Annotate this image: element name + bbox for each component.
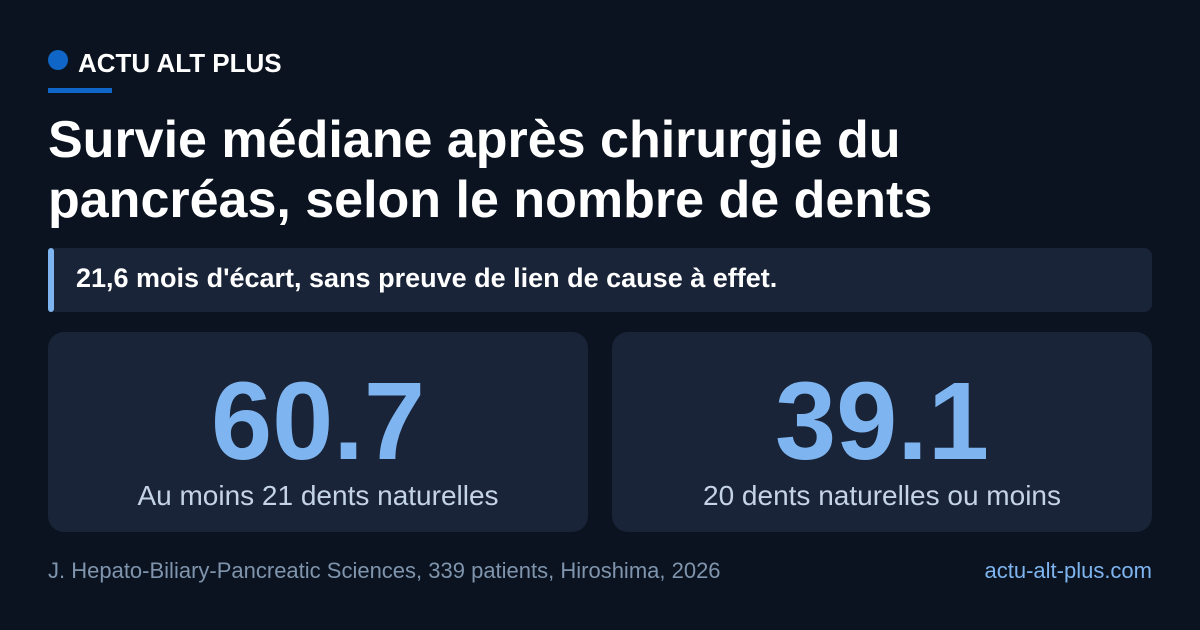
stat value: 60.7 bbox=[211, 360, 425, 483]
icon: brand dot bbox=[48, 50, 68, 70]
accent bar bbox=[48, 248, 54, 312]
panel: 20 teeth or fewer bbox=[612, 332, 1152, 532]
brand name: ACTU ALT PLUS bbox=[78, 48, 282, 78]
panel: key message bbox=[48, 248, 1152, 312]
key message text: 21,6 mois d'écart, sans preuve de lien de cause à effet. bbox=[76, 263, 777, 293]
title: pancréas, selon le nombre de dents bbox=[48, 171, 932, 229]
website: actu-alt-plus.com bbox=[984, 558, 1152, 583]
stat value: 39.1 bbox=[775, 360, 989, 483]
title bbox=[48, 111, 932, 229]
panel: at least 21 teeth bbox=[48, 332, 588, 532]
stat label: 20 dents naturelles ou moins bbox=[703, 480, 1061, 511]
brand underline bbox=[48, 88, 112, 93]
source: J. Hepato-Biliary-Pancreatic Sciences, 339 patients, Hiroshima, 2026 bbox=[48, 558, 721, 583]
title: Survie médiane après chirurgie du bbox=[48, 111, 901, 169]
stat label: Au moins 21 dents naturelles bbox=[137, 480, 499, 511]
